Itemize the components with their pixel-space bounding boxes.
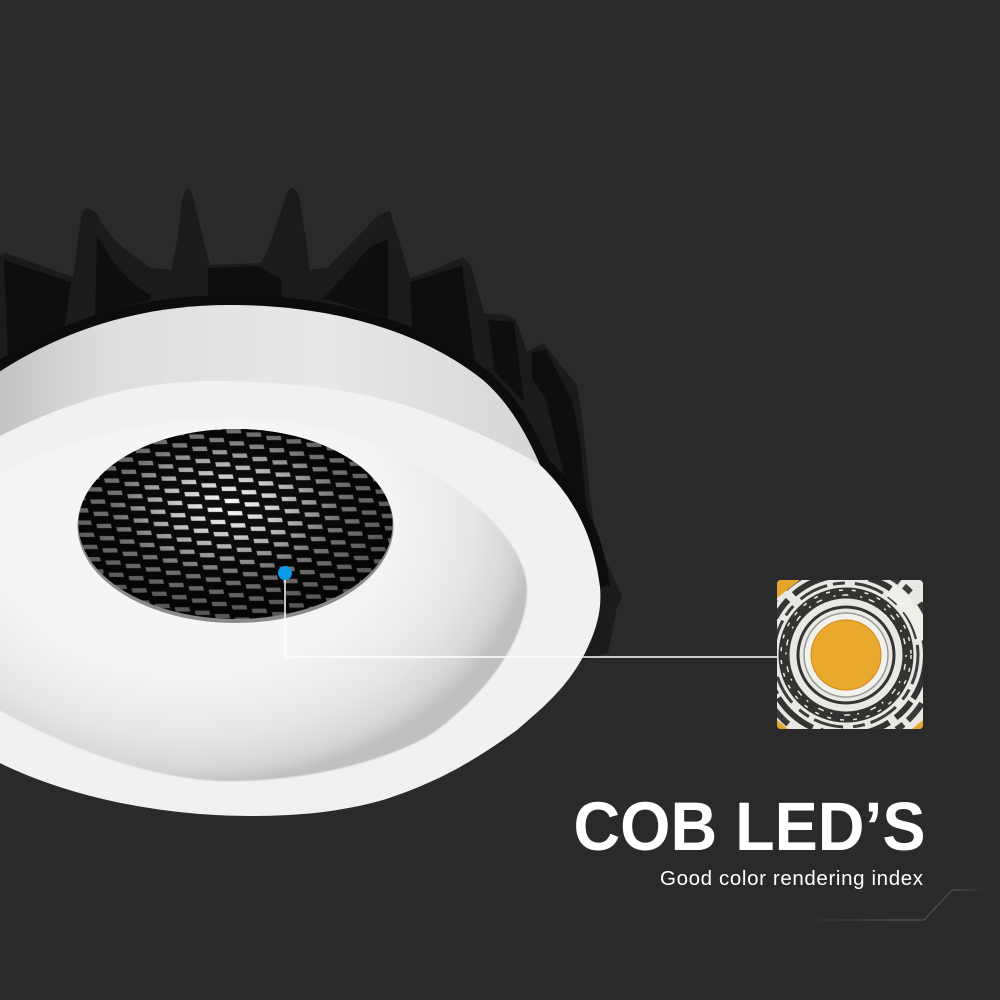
inset white highlight wedge — [890, 590, 924, 640]
shaded bowl reflector — [0, 418, 527, 781]
blue marker dot — [278, 566, 292, 580]
honeycomb lens — [78, 429, 394, 623]
honeycomb cells — [78, 429, 392, 619]
heat sink fins — [0, 188, 622, 660]
inset yellow LED — [811, 620, 881, 690]
title: COB LED’S — [574, 788, 926, 865]
lens lower edge — [78, 429, 394, 623]
inset yellow corners — [777, 580, 923, 729]
product: recessed downlight — [0, 188, 982, 920]
white upper rim band — [0, 305, 540, 600]
white lower rim band — [0, 381, 600, 816]
black rim shadow — [0, 305, 600, 587]
lens black base — [78, 429, 392, 619]
inset: COB LED close-up — [777, 580, 923, 729]
inset metal rings — [777, 580, 923, 729]
callout connector line — [285, 573, 777, 657]
decorative trace line — [803, 890, 982, 920]
inset base — [777, 580, 923, 729]
subtitle: Good color rendering index — [660, 867, 924, 890]
inset collar — [804, 613, 888, 697]
fin pockets — [4, 235, 592, 560]
